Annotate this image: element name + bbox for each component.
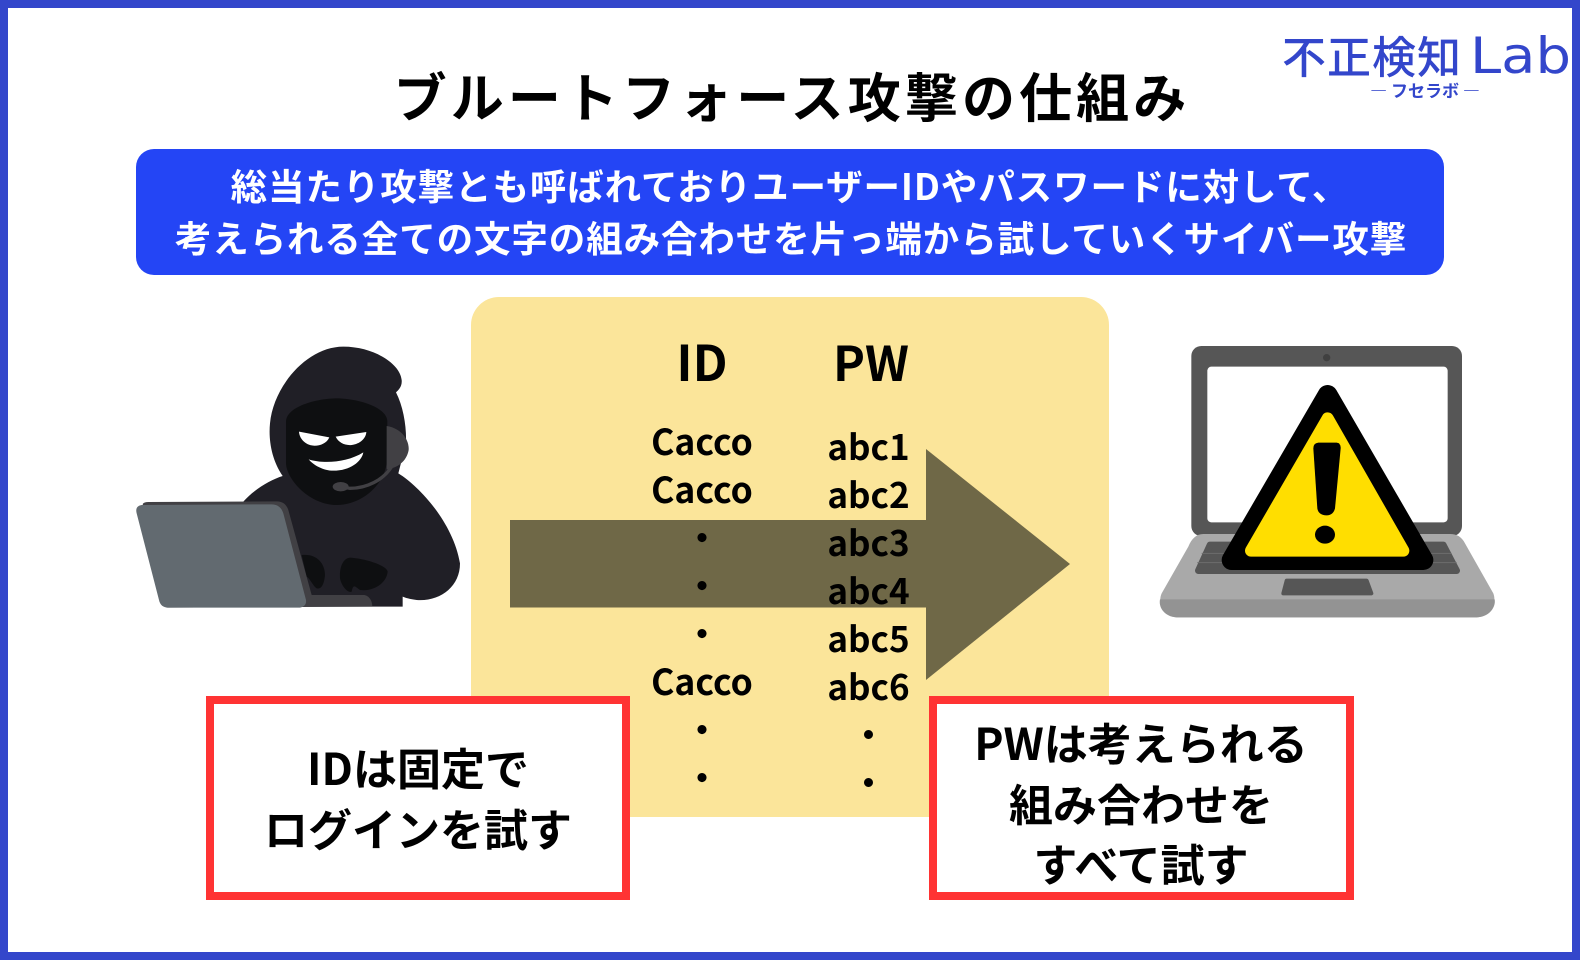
arrow: attack direction	[510, 449, 1070, 680]
title: ブルートフォース攻撃の仕組み	[394, 57, 1190, 133]
column: ID list: Cacco	[651, 655, 753, 706]
column: PW list: ・	[851, 708, 886, 759]
callout: PW all combinations: PWは考えられる	[974, 709, 1308, 773]
column: PW list	[827, 325, 910, 807]
logo: 不正検知Lab: 不正検知	[1282, 22, 1462, 86]
banner: definition of brute force attack	[136, 149, 1444, 275]
callout: PW all combinations: すべて試す	[1033, 830, 1249, 894]
column: ID list: ・	[684, 607, 720, 658]
callout: ID fixed: ログインを試す	[264, 795, 572, 859]
banner: definition of brute force attack: 総当たり攻撃とも呼ばれておりユーザーIDやパスワードに対して、	[231, 158, 1349, 211]
column: PW list: abc1	[827, 420, 910, 471]
column: PW list: abc4	[827, 564, 910, 615]
banner: definition of brute force attack: 考えられる全ての文字の組み合わせを片っ端から試していくサイバー攻撃	[175, 210, 1407, 263]
logo: 不正検知Lab: Lab	[1470, 27, 1571, 85]
callout: ID fixed: IDは固定で	[307, 734, 529, 798]
column: PW list: abc5	[827, 612, 910, 663]
column: ID list: ・	[684, 559, 720, 610]
column: ID list: ・	[684, 511, 720, 562]
callout: PW all combinations: 組み合わせを	[1009, 770, 1273, 834]
column: ID list	[651, 325, 753, 802]
logo: 不正検知Lab	[1282, 22, 1571, 102]
callout: PW all combinations	[933, 700, 1350, 896]
column: ID list: ・	[684, 751, 720, 802]
column: ID list: ・	[684, 703, 720, 754]
callout: ID fixed	[210, 700, 626, 896]
column: ID list: Cacco	[651, 463, 753, 514]
column: ID list: Cacco	[651, 415, 753, 466]
panel: ID and PW list background	[471, 297, 1109, 817]
column: ID list: ID	[676, 325, 728, 396]
logo: 不正検知Lab: ― フセラボ ―	[1370, 77, 1480, 102]
column: PW list: abc2	[827, 468, 910, 519]
column: PW list: ・	[851, 756, 886, 807]
column: PW list: PW	[833, 325, 909, 395]
icon: hacker at laptop	[136, 347, 460, 608]
column: PW list: abc6	[827, 660, 910, 711]
icon: laptop with warning triangle	[1160, 346, 1495, 617]
column: PW list: abc3	[827, 516, 910, 567]
